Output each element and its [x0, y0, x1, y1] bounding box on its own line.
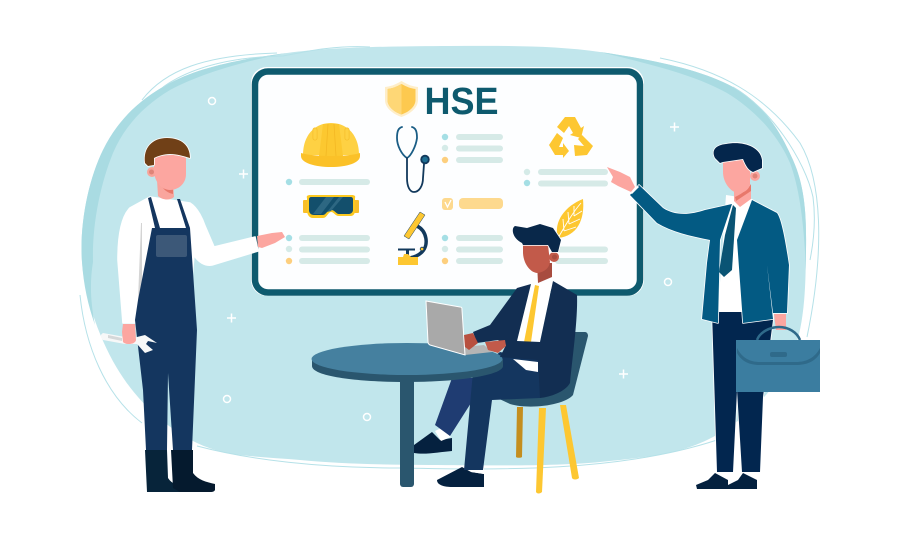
- background blob: [80, 46, 819, 469]
- shirt: [118, 197, 258, 323]
- list: microscope: [442, 235, 503, 264]
- icon: hard hat: [301, 123, 360, 167]
- list: leaf: [555, 246, 608, 264]
- seated businessman torso: [426, 224, 577, 398]
- decorative plus signs and circles: [208, 98, 679, 420]
- tie: [719, 205, 736, 277]
- icon: leaf: [557, 199, 583, 238]
- icon: recycling arrows: [549, 117, 593, 158]
- standing businessman: [607, 143, 820, 489]
- shoes: [696, 473, 757, 489]
- hands and wrench: [257, 232, 285, 248]
- checkbox row: [442, 198, 503, 210]
- table: [312, 343, 503, 487]
- icon: stethoscope: [397, 127, 429, 192]
- jacket: [630, 185, 732, 323]
- list: stethoscope: [442, 134, 503, 163]
- worker: [101, 138, 285, 492]
- list: goggles: [286, 235, 370, 264]
- seated businessman legs: [414, 352, 565, 487]
- pointing hand: [607, 167, 635, 192]
- list: recycling: [524, 169, 608, 186]
- hands: [464, 333, 478, 350]
- socks: [715, 470, 760, 481]
- tie: [524, 285, 539, 342]
- neck and head: [734, 188, 751, 207]
- shirt: [718, 195, 756, 312]
- icon: shield: [385, 81, 418, 117]
- trousers: [712, 312, 773, 472]
- overalls: [135, 228, 197, 450]
- neck and head: [537, 263, 552, 283]
- presentation board: [251, 67, 644, 296]
- title: HSE: [424, 81, 498, 123]
- list: hard hat: [286, 179, 370, 185]
- briefcase: [736, 327, 820, 392]
- icon: microscope: [398, 212, 426, 265]
- laptop: [426, 301, 492, 355]
- boots: [145, 450, 215, 492]
- hand on handle: [774, 314, 786, 330]
- chair: [493, 332, 588, 494]
- neck and head: [157, 180, 174, 200]
- icon: safety goggles: [303, 195, 359, 218]
- jacket: [473, 281, 577, 398]
- shirt: [517, 281, 553, 342]
